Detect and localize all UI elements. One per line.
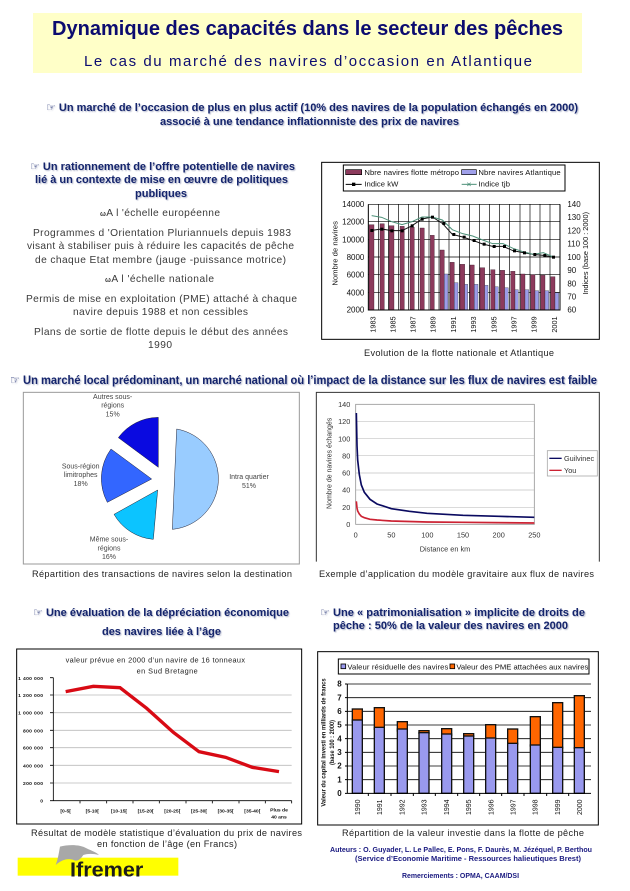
- axes and labels: 70: [567, 293, 577, 302]
- heading: active second-hand market: ☞ Un marché de l’occasion de plus en plus actif (10% des navires de la population échangés en 2000): [46, 102, 578, 114]
- price line: [66, 686, 279, 772]
- text block: policies: navire depuis 1988 et non cessibles: [73, 307, 248, 318]
- axis labels: 5: [337, 721, 342, 730]
- index lines: [370, 216, 555, 259]
- heading: patrimonialisation: [320, 607, 585, 632]
- pie labels: [62, 394, 269, 561]
- chart legend: [343, 165, 565, 191]
- axis labels: 0: [354, 531, 358, 540]
- pie labels: 18%: [74, 481, 88, 488]
- text block: policies: Programmes d 'Orientation Pluriannuels depuis 1983: [33, 228, 291, 239]
- caption: invested value: Répartition de la valeur investie dans la flotte de pêche: [342, 828, 584, 838]
- axis labels: 1 400 000: [18, 676, 43, 682]
- axis labels: 1992: [400, 799, 407, 815]
- subtitle: Le cas du marché des navires d’occasion en Atlantique: [84, 53, 532, 70]
- text block: policies: visant à stabiliser puis à réduire les capacités de pêche: [27, 241, 294, 252]
- pie labels: régions: [101, 403, 125, 410]
- caption: fleet evolution: Evolution de la flotte nationale et Atlantique: [364, 348, 554, 358]
- axis labels: 8: [337, 680, 342, 689]
- title banner: [33, 13, 582, 73]
- axis labels: 0: [346, 520, 350, 529]
- axis labels: 1 200 000: [18, 693, 43, 699]
- axis labels: 1: [337, 775, 342, 784]
- axes and labels: 1983: [368, 316, 377, 333]
- axes and labels: 14000: [342, 200, 365, 209]
- axes and labels: 80: [567, 279, 577, 288]
- axis labels: 100: [338, 434, 350, 443]
- axis labels: 150: [457, 531, 469, 540]
- axis labels: 250: [528, 531, 540, 540]
- authors and acknowledgements: [330, 845, 592, 880]
- axes and labels: 1999: [530, 316, 539, 333]
- axes and labels: Indices (base 100 : 2000): [581, 212, 590, 295]
- pie labels: Même sous-: [90, 536, 129, 543]
- pie labels: Autres sous-: [93, 394, 133, 401]
- authors and acknowledgements: (Service d’Economie Maritime - Ressources halieutiques Brest): [355, 854, 581, 863]
- text block: policies: ωA l 'échelle nationale: [105, 274, 214, 285]
- axes and labels: 120: [567, 226, 581, 235]
- axis labels: 600 000: [23, 746, 43, 752]
- pie labels: 51%: [242, 483, 256, 490]
- Atlantic fleet bars: [444, 274, 559, 310]
- axis labels: 100: [421, 531, 433, 540]
- axis labels: [5-10[: [86, 808, 99, 814]
- text block: policies: ωA l 'échelle européenne: [100, 208, 220, 219]
- heading: active second-hand market: associé à une tendance inflationniste des prix de navires: [160, 116, 459, 128]
- axes and labels: 8000: [347, 253, 365, 262]
- axis labels: 200: [493, 531, 505, 540]
- heading: economic depreciation: des navires liée à l’âge: [102, 626, 221, 638]
- axes and labels: 6000: [347, 271, 365, 280]
- axes and labels: 1997: [510, 316, 519, 333]
- Guilvinec and You curves: [356, 413, 534, 523]
- axis labels: 1999: [555, 799, 562, 815]
- text block: policies: [26, 208, 297, 351]
- pie labels: régions: [98, 545, 121, 552]
- axes and labels: 1985: [388, 316, 397, 333]
- axes and labels: 1995: [489, 316, 498, 333]
- axis labels: 7: [337, 693, 342, 702]
- caption: price model: Résultat de modèle statistique d’évaluation du prix de navires: [31, 828, 302, 838]
- axes and labels: Nombre de navires: [330, 221, 339, 286]
- text block: policies: Permis de mise en exploitation (PME) attaché à chaque: [26, 294, 297, 305]
- chart legend: Indice tjb: [478, 180, 510, 189]
- pie slices: [101, 417, 218, 539]
- axis labels: Valeur du capital investi en milliards de francs: [321, 678, 328, 807]
- axes and labels: 12000: [342, 218, 365, 227]
- axis labels: [15-20[: [138, 808, 154, 814]
- axis labels: 0: [337, 789, 342, 798]
- chart: pie of transactions by destination: [23, 392, 299, 564]
- heading: local market: ☞ Un marché local prédominant, un marché national où l’impact de la distance sur les flux de navires est faible: [10, 373, 597, 387]
- pie labels: Intra quartier: [229, 474, 269, 481]
- logo: Ifremer: [18, 845, 178, 881]
- axis labels: 40: [342, 486, 350, 495]
- chart title: [66, 655, 245, 676]
- curve legend: Guilvinec: [564, 454, 594, 463]
- axis labels: 2000: [577, 799, 584, 815]
- axis labels: 1993: [422, 799, 429, 815]
- axis labels: 50: [387, 531, 395, 540]
- chart legend: [338, 659, 589, 674]
- axis labels: 1995: [466, 799, 473, 815]
- axis labels: 1997: [510, 799, 517, 815]
- axis labels: 4: [337, 734, 342, 743]
- chart title: en Sud Bretagne: [137, 667, 198, 676]
- logo: Ifremer: Ifremer: [70, 858, 143, 881]
- axis labels: Distance en km: [420, 545, 470, 554]
- chart: fleet evolution bars and indices: [322, 162, 599, 339]
- axis labels: [30-35[: [218, 808, 234, 814]
- heading: rationing of fleet supply: ☞ Un rationnement de l’offre potentielle de navires: [30, 161, 295, 173]
- axis labels: Plus de: [270, 808, 288, 814]
- heading: economic depreciation: ☞ Une évaluation de la dépréciation économique: [33, 607, 289, 619]
- authors and acknowledgements: Auteurs : O. Guyader, L. Le Pallec, E. Pons, F. Daurès, M. Jézéquel, P. Berthou: [330, 845, 592, 854]
- caption: price model: en fonction de l’âge (en Francs): [97, 839, 237, 849]
- chart title: valeur prévue en 2000 d’un navire de 16 tonneaux: [66, 655, 245, 664]
- text block: policies: de chaque Etat membre (jauge -puissance motrice): [35, 255, 286, 266]
- pie labels: Sous-région: [62, 463, 100, 470]
- chart legend: Valeur résiduelle des navires: [347, 663, 449, 672]
- chart: gravity model curves: [316, 392, 599, 562]
- axis labels: 40 ans: [271, 815, 287, 821]
- heading: rationing of fleet supply: lié à un contexte de mise en œuvre de politiques: [35, 174, 288, 186]
- axes and labels: 4000: [347, 288, 365, 297]
- chart legend: Nbre navires Atlantique: [478, 168, 561, 177]
- axes and labels: 2001: [550, 316, 559, 333]
- text block: policies: Plans de sortie de flotte depuis le début des années: [34, 327, 288, 338]
- axes and labels: 90: [567, 266, 577, 275]
- axis labels: [35-40[: [244, 808, 261, 814]
- axis labels: 80: [342, 451, 350, 460]
- axes and labels: 1989: [429, 316, 438, 333]
- axis labels: [0-5[: [60, 808, 71, 814]
- axis labels: 1990: [355, 799, 362, 815]
- axis labels: 20: [342, 503, 350, 512]
- axis labels: 6: [337, 707, 342, 716]
- chart legend: Indice kW: [364, 180, 399, 189]
- curve legend: [547, 451, 597, 476]
- text block: policies: 1990: [148, 340, 172, 351]
- heading: rationing of fleet supply: [30, 161, 295, 200]
- heading: economic depreciation: [33, 607, 289, 638]
- pie labels: 15%: [106, 412, 120, 419]
- axis labels: (base 100 : 2000): [329, 720, 336, 765]
- main fleet bars: [369, 224, 555, 310]
- axes and labels: 1987: [409, 316, 418, 333]
- axes and labels: 110: [567, 240, 581, 249]
- heading: patrimonialisation: pêche : 50% de la valeur des navires en 2000: [333, 620, 568, 632]
- stacked bars: [352, 696, 584, 793]
- axis labels: 1994: [444, 799, 451, 815]
- axes and labels: 140: [567, 200, 581, 209]
- axis labels: [25-30[: [191, 808, 207, 814]
- axis labels: 1998: [533, 799, 540, 815]
- axis labels: 140: [338, 400, 350, 409]
- pie labels: 16%: [102, 554, 116, 561]
- axis labels: 1996: [488, 799, 495, 815]
- axis labels: [321, 678, 584, 815]
- axis labels: 1 000 000: [18, 711, 43, 717]
- heading: rationing of fleet supply: publiques: [135, 188, 187, 200]
- axis labels: 60: [342, 469, 350, 478]
- chart: invested value stacked bars: [318, 652, 598, 825]
- axis labels: 2: [337, 762, 342, 771]
- axis labels: 120: [338, 417, 350, 426]
- axis labels: [326, 400, 540, 554]
- axes and labels: 60: [567, 306, 577, 315]
- axis labels: [10-15[: [111, 808, 127, 814]
- heading: active second-hand market: [46, 102, 578, 128]
- caption: gravity model: Exemple d’application du modèle gravitaire aux flux de navires: [319, 569, 594, 579]
- caption: pie chart: Répartition des transactions de navires selon la destination: [32, 569, 292, 579]
- axis labels: 0: [40, 799, 43, 805]
- axes and labels: 130: [567, 213, 581, 222]
- axis labels: 1991: [377, 799, 384, 815]
- authors and acknowledgements: Remerciements : OPMA, CAAM/DSI: [402, 871, 519, 880]
- chart: predicted price by age: [17, 649, 302, 824]
- axes and labels: 2000: [347, 306, 365, 315]
- chart legend: Nbre navires flotte métropo: [364, 168, 459, 177]
- axes and labels: 1993: [469, 316, 478, 333]
- curve legend: You: [564, 466, 576, 475]
- axis labels: 800 000: [23, 728, 43, 734]
- caption: price model: [31, 828, 302, 849]
- axis labels: 400 000: [23, 763, 43, 769]
- axis labels: 200 000: [23, 781, 43, 787]
- chart legend: Valeur des PME attachées aux navires: [456, 663, 589, 672]
- axes and labels: 10000: [342, 235, 365, 244]
- pie labels: limitrophes: [64, 472, 98, 479]
- heading: patrimonialisation: ☞ Une « patrimonialisation » implicite de droits de: [320, 607, 585, 619]
- axes and labels: 1991: [449, 316, 458, 333]
- axis labels: [18, 676, 288, 821]
- axes and labels: [330, 200, 590, 333]
- main title: Dynamique des capacités dans le secteur des pêches: [52, 18, 563, 40]
- axis labels: 3: [337, 748, 342, 757]
- axis labels: Nombre de navires échangés: [326, 417, 333, 509]
- axes and labels: 100: [567, 253, 581, 262]
- axis labels: [20-25[: [164, 808, 181, 814]
